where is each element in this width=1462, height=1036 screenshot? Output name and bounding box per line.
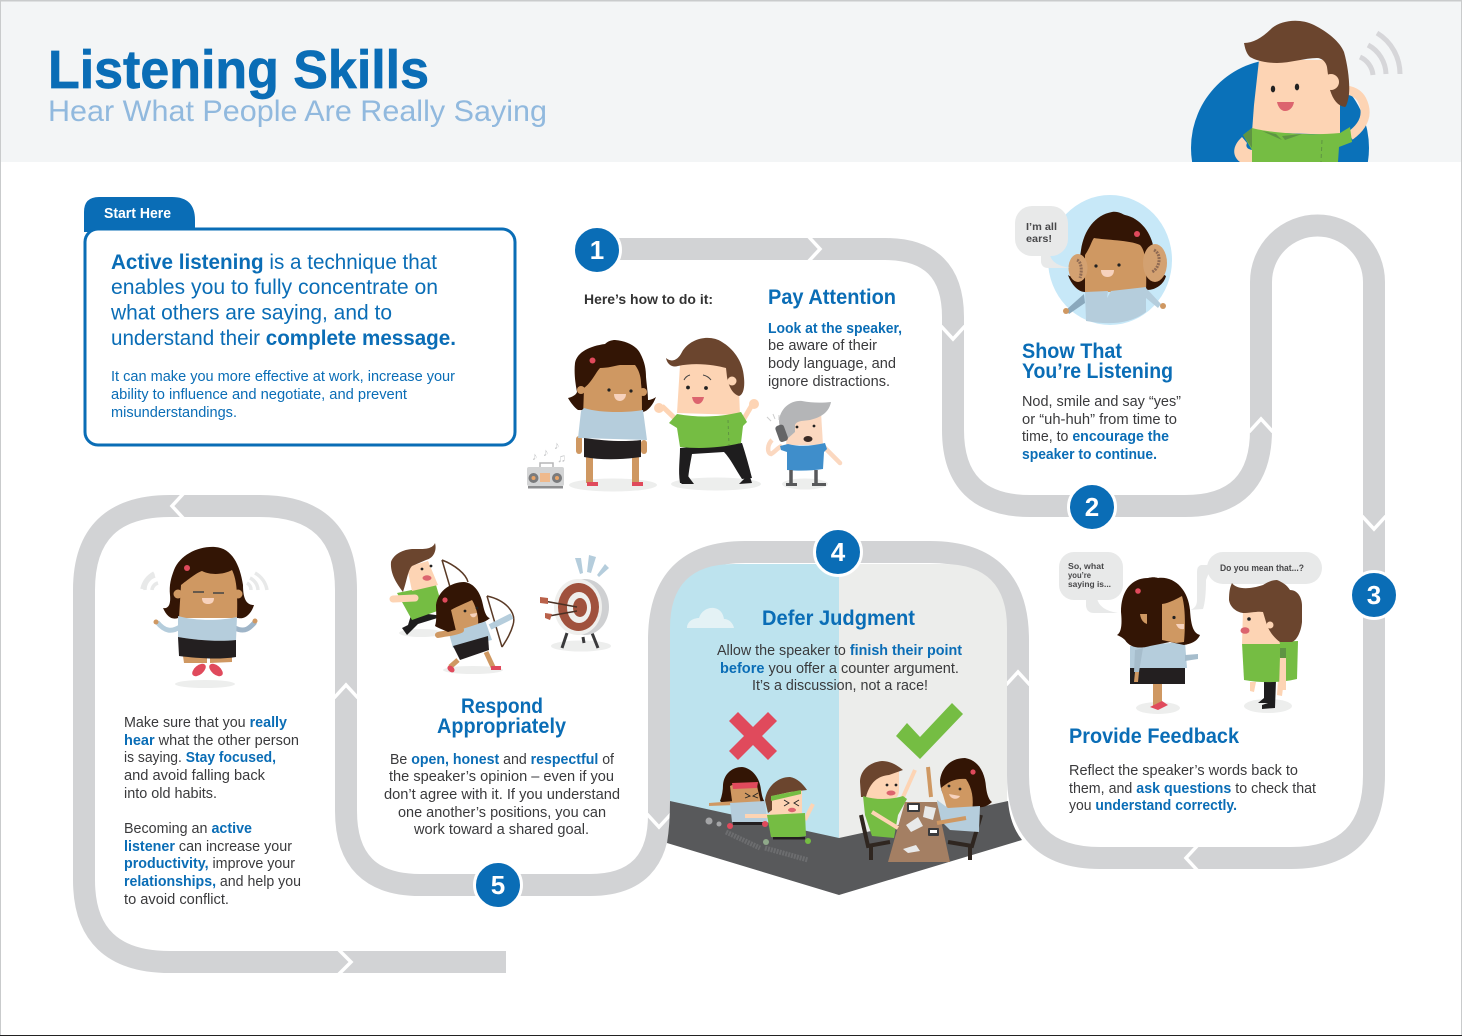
scene: people at a table high five [860,758,992,862]
man at table [903,770,915,797]
heading: provide feedback: Provide Feedback [1069,725,1239,748]
text: show that you're listening [1022,394,1181,463]
step 3 badge: 3 [1367,580,1381,610]
step 1 lead-in: Here’s how to do it: [584,291,713,307]
text: provide feedback: you understand correctly. [1069,798,1237,814]
intro text: Active listening is a technique that [111,251,437,274]
intro detail: It can make you more effective at work, increase your [111,369,455,385]
text: make sure: Make sure that you really [124,715,287,731]
text: make sure: hear what the other person [124,733,299,749]
text: pay attention [768,321,902,390]
tab: start here [84,197,195,232]
text: show that you're listening: or “uh-huh” from time to [1022,412,1177,428]
text: defer judgment: It’s a discussion, not a race! [752,678,928,694]
speech bubble: do you mean that: Do you mean that...? [1220,563,1304,573]
icon: woman listening to man [568,340,657,492]
icon: boombox with music notes: ♪ [554,440,560,452]
icon: archers and target [391,543,611,674]
text: make sure [124,715,299,802]
step 4 badge [814,528,862,576]
man archer [391,543,468,637]
step 1 badge [574,226,620,274]
speech bubble: do you mean that [1190,552,1322,610]
step 2 badge: 2 [1085,492,1099,522]
speech bubble: so what [1059,552,1123,613]
tab: start here: Start Here [104,206,171,222]
intro detail: ability to influence and negotiate, and prevent [111,387,407,403]
text: respond appropriately: Be open, honest and respectful of [390,752,615,768]
heading: show that you're listening: Show That [1022,340,1122,363]
intro detail [111,369,455,421]
text: respond appropriately: the speaker’s opinion – even if you [389,769,614,785]
icon: old man on phone [767,401,840,490]
icon: green check [896,703,963,759]
chairs [861,815,981,860]
step 2 badge [1068,484,1116,530]
panel 4 background [670,564,1007,840]
step 4 badge: 4 [831,537,846,567]
text: becoming an active listener [124,821,301,908]
text: show that you're listening: speaker to continue. [1022,447,1157,463]
floor [667,801,1022,895]
text: provide feedback: Reflect the speaker’s words back to [1069,763,1298,779]
icon: feedback conversation [1059,552,1322,714]
text: becoming an active listener: listener can increase your [124,839,292,855]
text: make sure: and avoid falling back [124,768,266,784]
title: Listening Skills [48,40,429,100]
intro text: understand their complete message. [111,327,456,350]
target [540,555,611,652]
heading: respond appropriately: Appropriately [437,715,566,738]
speech bubble text: i'm all ears: I’m all [1026,221,1057,233]
box outline [85,229,515,445]
intro text: what others are saying, and to [110,302,392,324]
text: make sure: is saying. Stay focused, [124,750,276,766]
text: defer judgment [717,643,962,694]
process track: grey winding path [84,226,1374,962]
text: respond appropriately: work toward a shared goal. [413,822,589,838]
text: pay attention: body language, and [768,356,896,372]
icon: boombox with music notes: ♪ [532,451,538,463]
text: pay attention: be aware of their [768,338,877,354]
text: provide feedback [1069,763,1316,814]
step 1 badge: 1 [590,235,604,265]
icon: boombox with music notes: ♪ [543,447,548,459]
text: show that you're listening: time, to encourage the [1022,429,1169,445]
text: becoming an active listener: productivity, improve your [124,856,295,872]
table [888,802,950,862]
heading: respond appropriately [437,695,566,738]
arrow chevrons along track [172,236,1386,975]
icon: red cross [729,712,777,760]
text: respond appropriately: don’t agree with it. If you understand [384,787,620,803]
speech bubble: so what: you’re [1068,570,1091,580]
woman at table [928,767,931,797]
icon: woman with big ears in circle [1015,195,1172,325]
speech bubble: so what: So, what [1068,561,1104,571]
text: pay attention: ignore distractions. [768,374,890,390]
man side view [1229,580,1302,713]
icon: meditating woman [142,547,267,688]
panel: start here [84,197,515,445]
text: becoming an active listener: to avoid conflict. [124,892,229,908]
speech bubble text: i'm all ears [1026,221,1057,245]
icon: cloud [687,608,734,628]
text: show that you're listening: Nod, smile and say “yes” [1022,394,1181,410]
icon: boombox with music notes [527,440,566,488]
heading: respond appropriately: Respond [461,695,543,718]
text: respond appropriately: one another’s positions, you can [398,805,606,821]
speech bubble text: i'm all ears: ears! [1026,233,1052,245]
text: becoming an active listener: relationships, and help you [124,874,301,890]
step 5 badge: 5 [491,870,505,900]
icon: man dancing [654,338,761,490]
intro text: enables you to fully concentrate on [111,276,438,299]
intro detail: misunderstandings. [111,405,237,421]
icon: header man listening [1191,20,1402,162]
text: defer judgment: before you offer a counter argument. [720,661,959,677]
text: defer judgment: Allow the speaker to finish their point [717,643,962,659]
text: respond appropriately [384,752,620,838]
subtitle: Hear What People Are Really Saying [48,95,547,128]
heading: show that you're listening: You’re Listening [1022,360,1173,383]
step 5 badge [474,862,522,908]
step 3 badge [1350,572,1398,618]
text: becoming an active listener: Becoming an active [124,821,252,837]
woman archer [435,582,514,674]
heading: show that you're listening [1022,340,1173,383]
intro text [110,251,456,350]
text: pay attention: Look at the speaker, [768,321,902,337]
woman side view [1117,577,1200,714]
heading: defer judgment: Defer Judgment [762,607,915,630]
scene: arguing characters running [706,767,813,860]
speech bubble: so what: saying is... [1068,579,1111,589]
icon: boombox with music notes: ♫ [557,451,566,465]
text: make sure: into old habits. [124,786,217,802]
text: provide feedback: them, and ask questions to check that [1069,781,1316,797]
heading: pay attention: Pay Attention [768,286,896,309]
